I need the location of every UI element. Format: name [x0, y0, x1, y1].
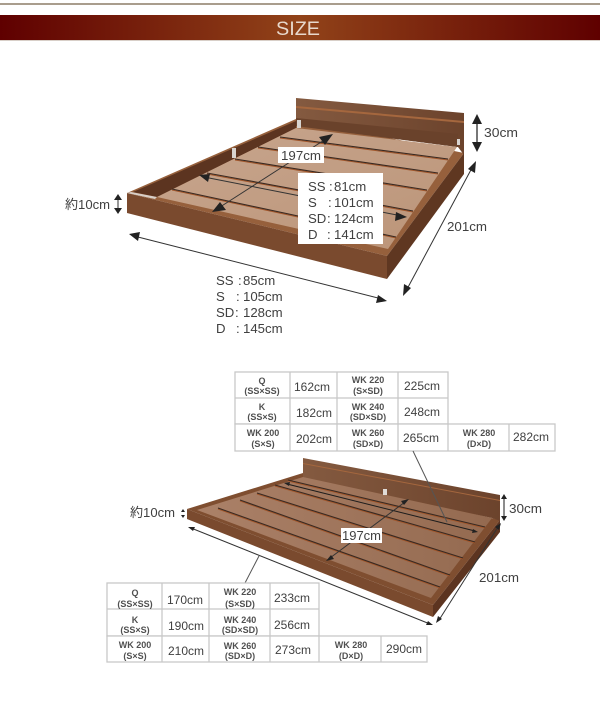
- outer width size list: SS: [216, 273, 234, 288]
- dimension: lower 201cm: [436, 523, 519, 623]
- table: outer widths: 256cm: [274, 618, 310, 632]
- outer width size list: :: [235, 305, 239, 320]
- table: outer widths: (SD×D): [225, 651, 255, 661]
- outer width size list: :: [236, 321, 240, 336]
- rim highlight: [127, 192, 157, 199]
- leader line: lower table: [245, 556, 259, 583]
- table: outer widths: Q: [131, 588, 139, 598]
- table: outer widths: (S×SD): [225, 599, 255, 609]
- table: inner widths: (SS×SS): [244, 386, 280, 396]
- label: 197cm: 197cm: [281, 148, 321, 163]
- frame front face: [127, 193, 387, 279]
- top rule: [0, 3, 600, 5]
- table: outer widths: (S×S): [123, 651, 147, 661]
- table: inner widths: WK 260: [352, 428, 384, 438]
- headboard: [303, 458, 500, 521]
- table: inner widths: (D×D): [467, 439, 491, 449]
- dimension: headboard 30cm: 30cm: [484, 125, 518, 140]
- dimension: lower 201cm: 201cm: [479, 570, 519, 585]
- brackets: [297, 120, 301, 128]
- inner width size list: 141cm: [334, 227, 374, 242]
- table: inner widths: 162cm: [294, 380, 330, 394]
- dimension: headboard 30cm: [472, 114, 518, 152]
- table: outer widths: K: [132, 615, 139, 625]
- outer width size list: 128cm: [243, 305, 283, 320]
- label: lower 197cm: 197cm: [342, 528, 381, 543]
- table: inner widths: 182cm: [296, 406, 332, 420]
- table: inner widths: K: [259, 402, 266, 412]
- table: outer widths: 190cm: [168, 619, 204, 633]
- outer width size list: [216, 273, 283, 336]
- table: inner widths: WK 280: [463, 428, 495, 438]
- slats: [218, 480, 485, 588]
- bed illustration: top view: [127, 98, 464, 279]
- dimension: lower 30cm: [501, 494, 542, 521]
- slats: [172, 137, 448, 238]
- arrow: outer width: [129, 232, 387, 303]
- table: outer widths: 233cm: [274, 591, 310, 605]
- slat floor: [157, 128, 457, 249]
- table: inner widths: 248cm: [404, 405, 440, 419]
- inner width size list: :: [328, 195, 332, 210]
- frame top: [187, 473, 500, 605]
- inner width size list: SD: [308, 211, 326, 226]
- inner left wall: [133, 121, 296, 197]
- inner width size list: D: [308, 227, 318, 242]
- table: outer widths: [107, 583, 427, 662]
- outer width size list: 105cm: [243, 289, 283, 304]
- dimension: lower 30cm: 30cm: [509, 501, 542, 516]
- table: outer widths: 290cm: [386, 642, 422, 656]
- table: inner widths: [235, 372, 555, 451]
- arrow: lower 197cm depth: [326, 499, 409, 561]
- arrow: inner width: [199, 174, 407, 221]
- inner width size list: :: [327, 227, 331, 242]
- inner width size list: 81cm: [334, 179, 366, 194]
- dimension: 201cm: 201cm: [447, 219, 487, 234]
- frame top: [127, 119, 464, 256]
- dimension: lower frame height: 約10cm: [130, 505, 175, 520]
- table: outer widths: WK 220: [224, 587, 256, 597]
- bracket: [383, 489, 387, 495]
- table: outer widths: 170cm: [167, 593, 203, 607]
- arrow: lower inner width: [284, 482, 478, 533]
- table: inner widths: WK 240: [352, 402, 384, 412]
- dimension: 201cm: [403, 161, 487, 296]
- table: outer widths: WK 280: [335, 640, 367, 650]
- table: outer widths: WK 260: [224, 641, 256, 651]
- table: inner widths: 225cm: [404, 379, 440, 393]
- dimension: frame height 10cm: [65, 194, 122, 214]
- headboard: [296, 98, 464, 155]
- table: inner widths: Q: [258, 376, 266, 386]
- table: outer widths: (SS×S): [120, 625, 150, 635]
- outer width size list: :: [238, 273, 242, 288]
- inner width size list: SS: [308, 179, 326, 194]
- outer width size list: 145cm: [243, 321, 283, 336]
- table: inner widths: 265cm: [403, 431, 439, 445]
- table: outer widths: 210cm: [168, 644, 204, 658]
- frame faces: [187, 509, 433, 617]
- title banner: [0, 15, 600, 41]
- bed illustration: lower view: [187, 458, 500, 617]
- outer width size list: 85cm: [243, 273, 275, 288]
- table: outer widths: WK 200: [119, 640, 151, 650]
- arrow: lower outer width: [188, 527, 433, 625]
- inner width size list: 124cm: [334, 211, 374, 226]
- table: inner widths: (S×S): [251, 439, 275, 449]
- outer width size list: :: [236, 289, 240, 304]
- outer width size list: SD: [216, 305, 234, 320]
- arrow: 197cm depth: [212, 134, 333, 212]
- title banner: SIZE: [276, 19, 320, 40]
- table: inner widths: 202cm: [296, 432, 332, 446]
- table: inner widths: WK 200: [247, 428, 279, 438]
- table: inner widths: (SD×D): [353, 439, 383, 449]
- table: inner widths: WK 220: [352, 375, 384, 385]
- table: inner widths: 282cm: [513, 430, 549, 444]
- outer width size list: D: [216, 321, 226, 336]
- outer width size list: S: [216, 289, 225, 304]
- table: inner widths: (S×SD): [353, 386, 383, 396]
- inner width size list: [298, 173, 383, 244]
- leader line: upper table: [413, 451, 447, 522]
- table: outer widths: (D×D): [339, 651, 363, 661]
- table: inner widths: (SD×SD): [350, 412, 386, 422]
- table: outer widths: 273cm: [275, 643, 311, 657]
- dimension: frame height 10cm: 約10cm: [65, 197, 110, 212]
- inner width size list: S: [308, 195, 317, 210]
- inner width size list: :: [329, 179, 333, 194]
- slat floor: [197, 477, 492, 598]
- table: outer widths: WK 240: [224, 615, 256, 625]
- inner width size list: 101cm: [334, 195, 374, 210]
- table: outer widths: (SS×SS): [117, 599, 153, 609]
- table: inner widths: (SS×S): [247, 412, 277, 422]
- inner width size list: :: [327, 211, 331, 226]
- table: outer widths: (SD×SD): [222, 625, 258, 635]
